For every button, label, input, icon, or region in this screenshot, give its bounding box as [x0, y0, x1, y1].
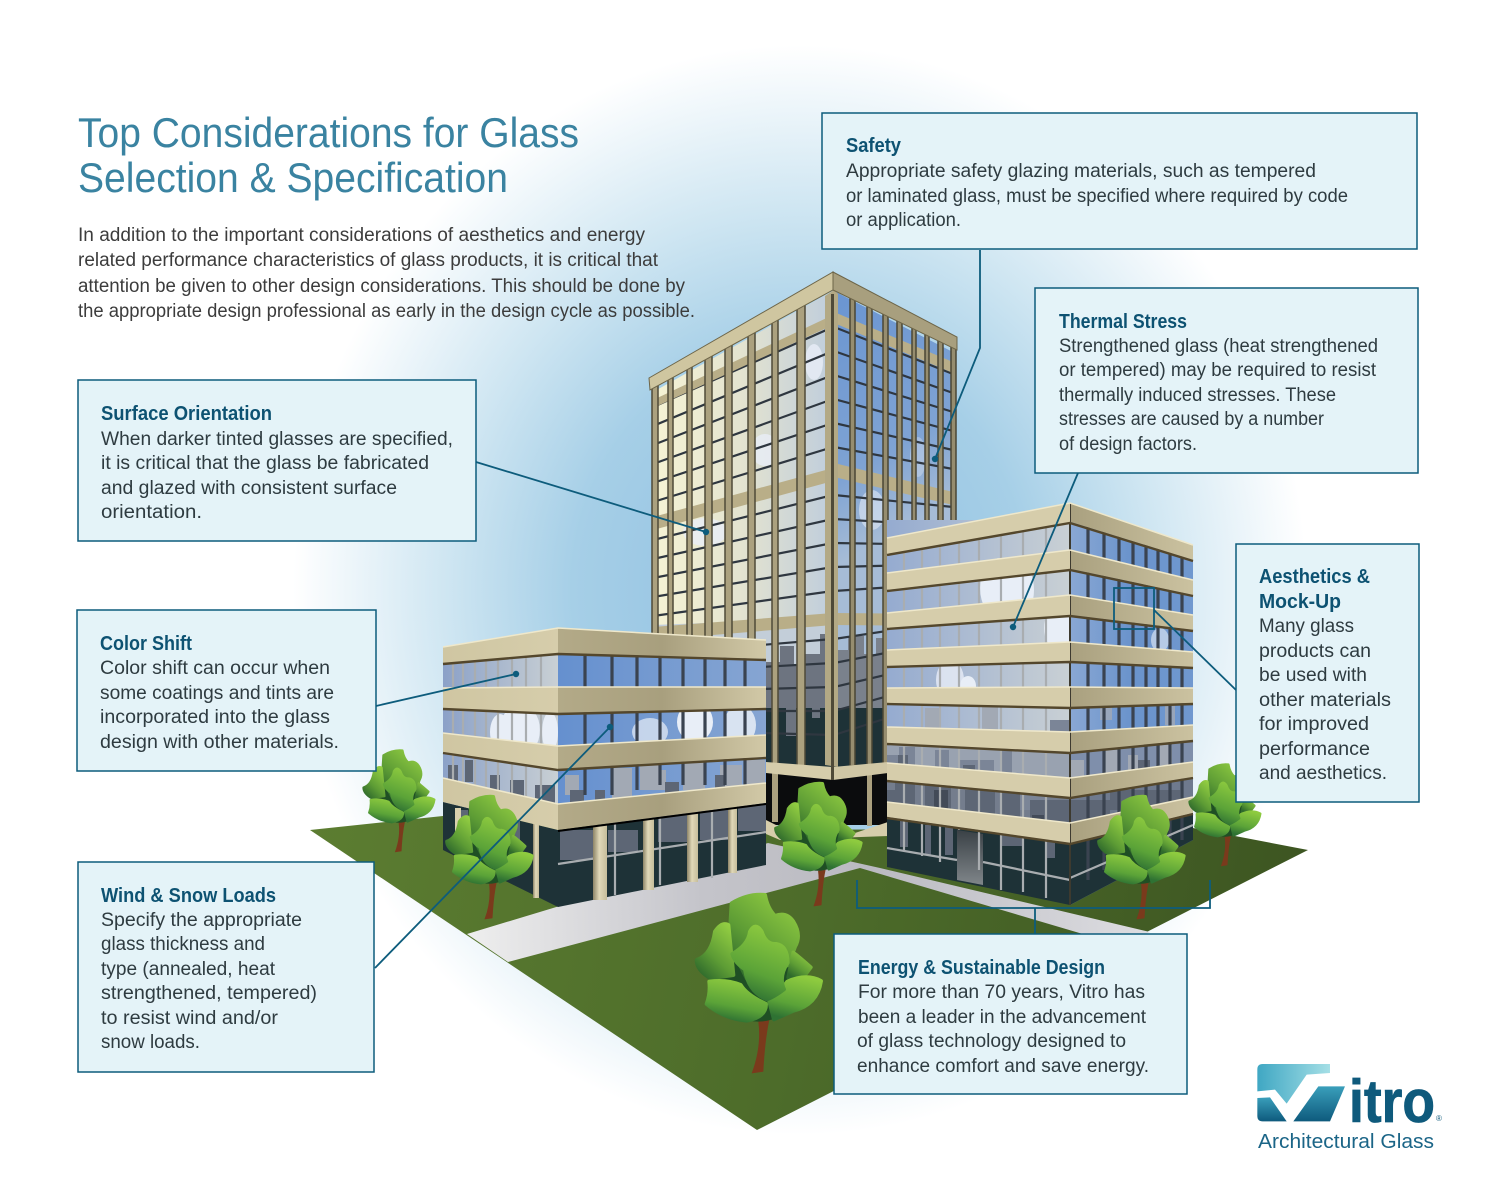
panel: color shift: incorporated into the glass	[100, 707, 330, 728]
panel: wind and snow loads: glass thickness and	[101, 934, 265, 955]
panel: wind and snow loads	[78, 862, 374, 1072]
panel: energy and sustainable design: of glass technology designed to	[857, 1031, 1126, 1052]
panel: aesthetics and mock-up: Mock-Up	[1259, 591, 1341, 613]
low office building	[443, 628, 766, 907]
leader: safety	[932, 250, 980, 462]
right face glazing	[1070, 503, 1193, 905]
panel: wind and snow loads: strengthened, tempered)	[101, 983, 317, 1004]
panel: surface orientation: it is critical that the glass be fabricated	[101, 453, 429, 474]
tower left face mullions	[652, 305, 805, 767]
panel: surface orientation: Surface Orientation	[101, 403, 272, 425]
bands right	[1071, 503, 1193, 843]
tree centre	[776, 783, 861, 906]
panel: thermal stress: of design factors.	[1059, 434, 1197, 455]
logo: Vitro Architectural Glass: Architectural Glass	[1258, 1131, 1434, 1153]
panel: wind and snow loads: to resist wind and/or	[101, 1008, 279, 1029]
panel: energy and sustainable design: For more than 70 years, Vitro has	[858, 982, 1145, 1003]
panel: safety: or application.	[846, 210, 961, 231]
panel: surface orientation: and glazed with consistent surface	[101, 478, 397, 499]
panel: wind and snow loads: Wind & Snow Loads	[101, 885, 276, 907]
bands left	[887, 503, 1070, 843]
panel: color shift: Color Shift	[100, 633, 192, 655]
panel: thermal stress: thermally induced stresses. These	[1059, 385, 1336, 406]
tree by low building	[446, 796, 532, 919]
left face glazing	[443, 650, 558, 907]
panel: aesthetics and mock-up: other materials	[1259, 690, 1391, 711]
panel: wind and snow loads: Specify the appropriate	[101, 910, 302, 931]
panel: surface orientation: orientation.	[101, 502, 202, 523]
logo wordmark: itro	[1349, 1068, 1435, 1135]
glazing mullions	[904, 510, 1046, 898]
title	[78, 109, 579, 201]
glazing mullions	[453, 654, 541, 806]
leader: aesthetics callout square	[1114, 588, 1236, 690]
panel: safety: Safety	[846, 135, 902, 157]
panel: wind and snow loads: type (annealed, heat	[101, 959, 276, 980]
corner	[1069, 503, 1071, 905]
intro text: In addition to the important considerations of aesthetics and energy	[78, 225, 645, 246]
tower left face	[653, 290, 834, 770]
leader: surface orientation	[476, 462, 709, 535]
tree far left	[364, 750, 434, 852]
tower building	[649, 272, 957, 840]
bands right	[558, 628, 766, 830]
leader: wind and snow loads	[375, 724, 613, 968]
panel: energy and sustainable design	[834, 934, 1187, 1094]
tower lobby	[766, 762, 888, 840]
right office building	[887, 503, 1193, 905]
panel: safety	[822, 113, 1417, 249]
panel: energy and sustainable design: enhance comfort and save energy.	[857, 1056, 1149, 1077]
panel: thermal stress: or tempered) may be required to resist	[1059, 360, 1377, 381]
panel: thermal stress: stresses are caused by a number	[1059, 409, 1325, 430]
panel: surface orientation	[78, 380, 476, 541]
leader: energy bracket	[857, 880, 1210, 934]
panel: aesthetics and mock-up	[1236, 544, 1419, 802]
ground with walkways	[310, 816, 1308, 1130]
bands left	[443, 628, 558, 830]
intro text: attention be given to other design considerations. This should be done by	[78, 276, 685, 297]
leader: thermal stress	[1010, 473, 1078, 630]
panel: color shift: Color shift can occur when	[100, 658, 330, 679]
tower right face	[834, 291, 953, 770]
panel: aesthetics and mock-up: be used with	[1259, 665, 1367, 686]
panel: wind and snow loads: snow loads.	[101, 1032, 200, 1053]
door	[957, 830, 983, 885]
intro text: the appropriate design professional as early in the design cycle as possible.	[78, 301, 695, 322]
intro text	[78, 225, 695, 322]
panel: surface orientation: When darker tinted glasses are specified,	[101, 429, 453, 450]
panel: color shift: some coatings and tints are	[100, 683, 334, 704]
tower parapet	[649, 272, 957, 390]
title: Top Considerations for Glass	[78, 109, 579, 156]
left face glazing	[887, 520, 1072, 905]
right face glazing	[558, 650, 766, 907]
tower corner column	[825, 290, 838, 780]
tree foreground	[697, 895, 821, 1073]
panel: thermal stress	[1035, 288, 1418, 473]
panel: energy and sustainable design: Energy & Sustainable Design	[858, 957, 1105, 979]
logo: Vitro Architectural Glass	[1257, 1064, 1442, 1153]
tree right front	[1098, 796, 1184, 919]
panel: aesthetics and mock-up: performance	[1259, 739, 1370, 760]
panel: safety: Appropriate safety glazing materials, such as tempered	[846, 161, 1316, 182]
logo mark	[1257, 1064, 1345, 1121]
logo: Vitro Architectural Glass: ®	[1436, 1114, 1442, 1123]
panel: aesthetics and mock-up: and aesthetics.	[1259, 763, 1387, 784]
title: Selection & Specification	[78, 154, 508, 201]
panel: safety: or laminated glass, must be specified where required by code	[846, 186, 1348, 207]
tower right face mullions	[850, 294, 956, 766]
panel: aesthetics and mock-up: for improved	[1259, 714, 1369, 735]
intro text: related performance characteristics of glass products, it is critical that	[78, 250, 659, 271]
panel: energy and sustainable design: been a leader in the advancement	[858, 1007, 1147, 1028]
panel: color shift	[77, 610, 376, 771]
panel: thermal stress: Thermal Stress	[1059, 311, 1187, 333]
panel: color shift: design with other materials.	[100, 732, 339, 753]
panel: aesthetics and mock-up: Aesthetics &	[1259, 566, 1370, 588]
panel: thermal stress: Strengthened glass (heat strengthened	[1059, 336, 1378, 357]
tree right back	[1190, 764, 1260, 866]
leader: color shift	[376, 671, 519, 706]
panel: aesthetics and mock-up: Many glass	[1259, 616, 1354, 637]
panel: aesthetics and mock-up: products can	[1259, 641, 1371, 662]
